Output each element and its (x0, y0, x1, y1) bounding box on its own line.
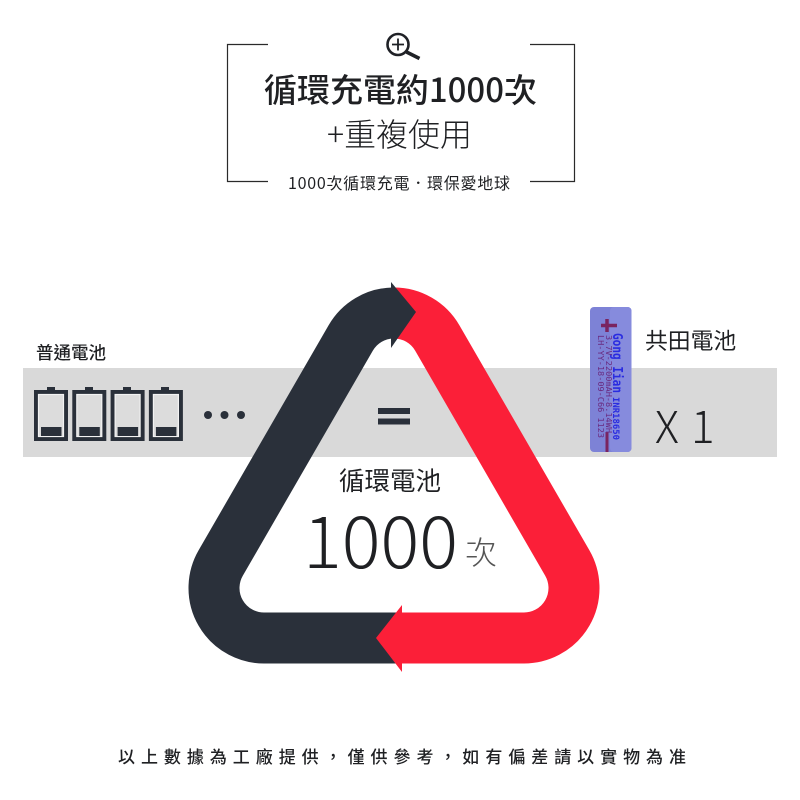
arrow: dark side (214, 282, 416, 638)
icon: magnifier (388, 34, 420, 58)
caption: eco message: 1000次循環充電．環保愛地球 (288, 170, 510, 194)
icon: battery 1 (36, 387, 66, 439)
icon: lithium battery (590, 307, 632, 452)
arrow head: red (376, 605, 440, 672)
brand text: Gong Iian (609, 333, 624, 393)
model text: INR18650 (610, 397, 620, 440)
spec text line 1: 3.7V-2200mAH-8.14WH (604, 335, 613, 433)
subtitle: reuse: +重複使用 (327, 110, 472, 156)
label: ordinary batteries: 普通電池 (36, 340, 106, 365)
equals sign (378, 408, 410, 424)
icon: battery 4 (151, 387, 181, 439)
plus terminal (601, 319, 617, 332)
footer disclaimer: 以上數據為工廠提供，僅供參考，如有偏差請以實物為准 (118, 743, 686, 768)
multiplier x 1: 1 (691, 392, 715, 456)
big number 1000: 1000 (303, 488, 458, 589)
heading frame (228, 44, 574, 182)
icons: ordinary batteries (36, 387, 181, 439)
icon: battery 2 (74, 387, 104, 439)
title: 循環充電約1000次 (264, 64, 537, 112)
arrow: red side (394, 313, 574, 638)
minus terminal (606, 432, 608, 452)
icon: battery 3 (113, 387, 143, 439)
multiplier x 1: X (655, 392, 679, 456)
cycle triangle (214, 282, 574, 672)
ellipsis dots (204, 411, 245, 419)
label: brand battery: 共田電池 (645, 323, 736, 356)
unit: times: 次 (465, 528, 497, 574)
grey band (23, 368, 777, 457)
label: rechargeable battery: 循環電池 (339, 461, 441, 498)
spec text line 2: LH-YY-18-09-C66 1123 (596, 335, 605, 438)
